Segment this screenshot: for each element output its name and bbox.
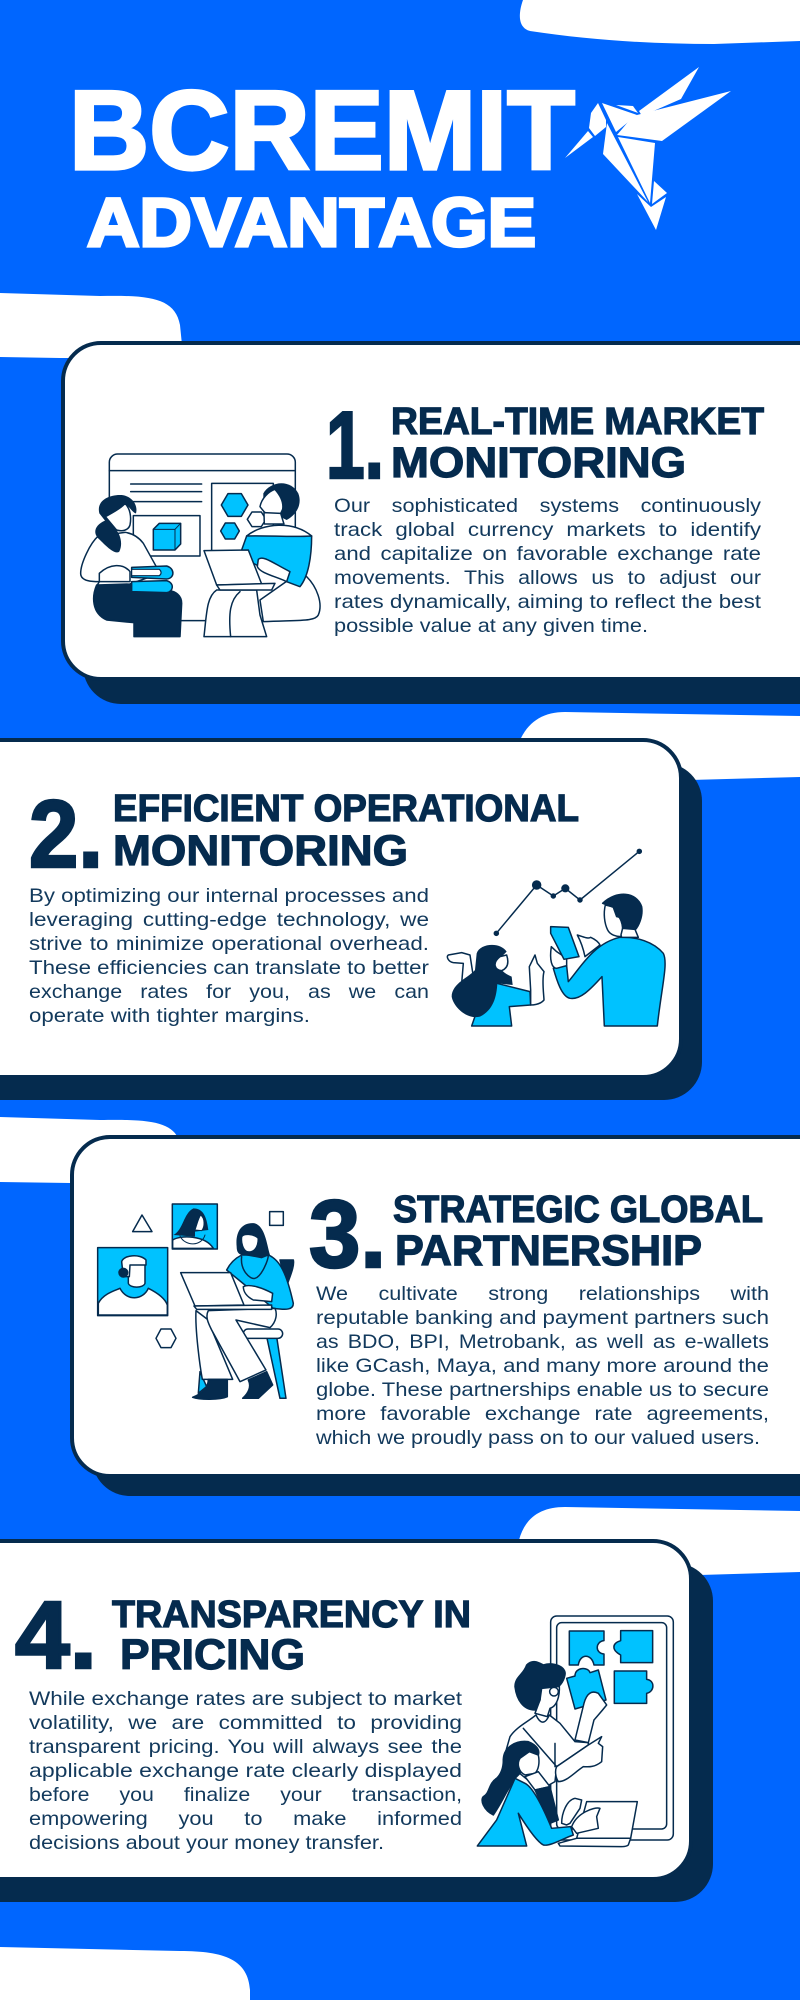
- number 4: 4.: [15, 1582, 97, 1689]
- body text 4: While exchange rates are subject to market: [29, 1688, 463, 1710]
- body text 2: exchange rates for you, as we can: [29, 981, 429, 1003]
- heading 4: TRANSPARENCY IN: [112, 1594, 471, 1636]
- body text 3: like GCash, Maya, and many more around the: [316, 1355, 769, 1377]
- panel: card 4 transparency in pricing: [0, 1541, 713, 1902]
- title line 2: ADVANTAGE: [87, 184, 536, 261]
- body text 4: volatility, we are committed to providing: [29, 1712, 462, 1734]
- body text 1: and capitalize on favorable exchange rate: [334, 543, 761, 565]
- man with tablet: [551, 894, 665, 1026]
- white blob right 2: [521, 712, 800, 780]
- heading 3: [393, 1189, 763, 1275]
- heading 3: PARTNERSHIP: [395, 1227, 702, 1275]
- video tile: man with headset: [98, 1248, 168, 1316]
- title: [69, 68, 575, 261]
- illustration: two people with puzzle: [477, 1616, 673, 1847]
- body text 3: reputable banking and payment partners such: [316, 1307, 769, 1329]
- panel: card 3 strategic global partnership: [72, 1137, 800, 1496]
- body text 1: track global currency markets to identify: [334, 519, 761, 541]
- body text 1: rates dynamically, aiming to reflect the best: [334, 591, 762, 613]
- white blob right 4: [519, 1507, 800, 1575]
- body text 3: more favorable exchange rate agreements,: [316, 1403, 769, 1425]
- card 4 shadow: [0, 1563, 713, 1902]
- white blob left 1: [0, 293, 182, 358]
- illustration: woman on video call: [98, 1204, 294, 1399]
- body text 1: Our sophisticated systems continuously: [334, 495, 761, 517]
- heading 3: STRATEGIC GLOBAL: [393, 1189, 763, 1231]
- body text 4: before you finalize your transaction,: [29, 1784, 462, 1806]
- body text 3: globe. These partnerships enable us to secure: [316, 1379, 769, 1401]
- body text 1: movements. This allows us to adjust our: [334, 567, 762, 589]
- body text 4: decisions about your money transfer.: [29, 1832, 384, 1854]
- body text 2: [29, 885, 430, 1027]
- body text 3: [315, 1283, 769, 1449]
- dashboard window: [109, 454, 295, 621]
- video tile: woman: [172, 1204, 217, 1249]
- card 3 shadow: [92, 1160, 800, 1496]
- illustration: two women with dashboard: [81, 454, 320, 637]
- panel: card 1 real-time market monitoring: [63, 343, 800, 704]
- white blob top right: [520, 0, 800, 44]
- heading 4: PRICING: [120, 1631, 305, 1679]
- illustration: two people with rising chart: [447, 849, 665, 1026]
- card 4 body: [0, 1541, 691, 1879]
- heading 1: REAL-TIME MARKET: [391, 401, 764, 443]
- line chart: [494, 849, 641, 935]
- body text 4: transparent pricing. You will always see the: [29, 1736, 462, 1758]
- woman at laptop: [477, 1741, 637, 1847]
- heading 4: [112, 1594, 471, 1679]
- icon: origami bird logo: [565, 67, 731, 230]
- card 2 shadow: [0, 763, 702, 1100]
- card 3 body: [72, 1137, 800, 1476]
- body text 4: applicable exchange rate clearly displayed: [29, 1760, 462, 1782]
- heading 1: MONITORING: [391, 439, 686, 487]
- seated woman with books: [81, 495, 182, 637]
- number 2: 2.: [29, 781, 103, 888]
- panel: card 2 efficient operational monitoring: [0, 740, 702, 1100]
- card 1 shadow: [83, 370, 800, 704]
- body text 2: strive to minimize operational overhead.: [29, 933, 429, 955]
- tablet with puzzle pieces: [551, 1616, 673, 1840]
- body text 2: By optimizing our internal processes and: [29, 885, 429, 907]
- body text 2: operate with tighter margins.: [29, 1005, 310, 1027]
- body text 4: empowering you to make informed: [29, 1808, 462, 1830]
- white blob bottom left: [0, 1947, 250, 2000]
- body text 1: [334, 495, 762, 637]
- heading 2: EFFICIENT OPERATIONAL: [113, 788, 579, 830]
- card 1 body: [63, 343, 800, 679]
- body text 2: leveraging cutting-edge technology, we: [29, 909, 429, 931]
- woman with laptop: [204, 483, 320, 637]
- body text 3: as BDO, BPI, Metrobank, as well as e-wallets: [316, 1331, 769, 1353]
- woman pointing: [447, 945, 544, 1026]
- white blob left 3: [0, 1117, 179, 1183]
- number 3: 3.: [309, 1181, 386, 1288]
- body text 4: [29, 1688, 463, 1854]
- title line 1: BCREMIT: [69, 68, 575, 193]
- heading 1: [391, 401, 764, 487]
- body text 3: which we proudly pass on to our valued users.: [315, 1427, 760, 1449]
- shape icons: [133, 1212, 283, 1348]
- heading 2: MONITORING: [113, 827, 408, 875]
- heading 2: [113, 788, 579, 875]
- body text 3: We cultivate strong relationships with: [316, 1283, 769, 1305]
- body text 1: possible value at any given time.: [334, 615, 648, 637]
- body text 2: These efficiencies can translate to better: [29, 957, 430, 979]
- number 1: 1.: [326, 392, 384, 499]
- woman at laptop: [181, 1223, 294, 1399]
- man placing puzzle piece: [503, 1662, 607, 1790]
- card 2 body: [0, 740, 681, 1077]
